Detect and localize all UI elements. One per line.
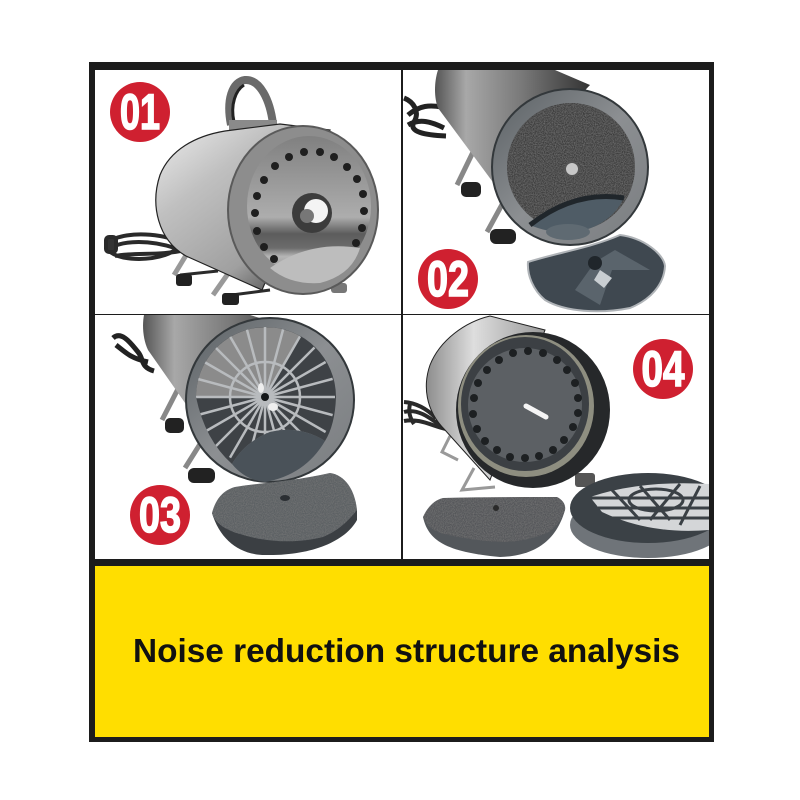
yellow caption panel [95, 566, 709, 737]
dryer face with grille [186, 318, 354, 482]
removed cover [528, 235, 665, 311]
icon: stand legs [457, 150, 516, 244]
dryer body [156, 124, 330, 290]
dryer body [435, 70, 590, 185]
lower solid crescent [232, 430, 325, 482]
badge 03: 03 [139, 487, 181, 543]
heading: Noise reduction structure analysis [133, 632, 680, 669]
icon: stand legs [442, 436, 595, 490]
icon: vent holes [251, 148, 368, 263]
panel dividers [95, 70, 709, 566]
icon: power cable [106, 234, 185, 259]
icon: power cable [404, 98, 446, 136]
icon: stand legs [162, 385, 215, 483]
dryer body [426, 316, 545, 480]
panel 01: assembled dryer [95, 70, 401, 314]
badge 02: 02 [427, 251, 469, 307]
dryer face with foam [492, 89, 648, 245]
dryer body [143, 315, 260, 404]
icon: grille spokes [195, 327, 335, 467]
dryer open housing [456, 332, 610, 488]
panel 04: all parts separated [403, 315, 726, 559]
icon: power cable [404, 402, 446, 429]
panel 02: cover removed, foam visible [403, 70, 709, 314]
panel 03: foam removed, grille visible [95, 315, 401, 559]
removed cover with grille [570, 473, 709, 558]
foam pad [212, 473, 357, 555]
icon: centre screw [565, 162, 579, 176]
badge 01: 01 [120, 84, 160, 140]
foam pad [423, 497, 565, 557]
icon: vent holes [469, 347, 582, 462]
icon: power cable [113, 336, 154, 371]
icon: stand legs [174, 252, 347, 305]
outer frame [89, 62, 714, 742]
icon: grille bars [590, 484, 709, 525]
dryer face [228, 126, 378, 294]
icon: carry handle [229, 80, 277, 133]
icon: centre hub [292, 193, 332, 233]
badge 04: 04 [642, 341, 685, 397]
icon: white shaft [526, 406, 546, 417]
